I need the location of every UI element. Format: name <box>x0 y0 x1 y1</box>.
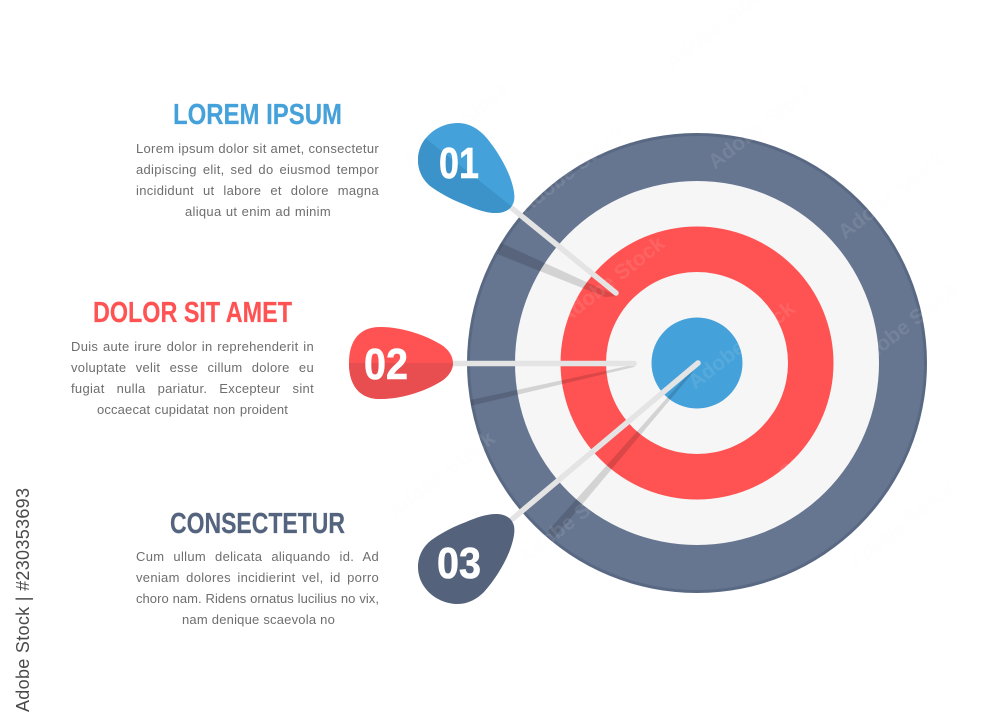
watermark: Adobe Stock <box>514 122 629 219</box>
heading: dolor sit amet: DOLOR SIT AMET <box>93 297 292 329</box>
dart 01 <box>400 118 616 293</box>
text block 1: Lorem ipsum dolor sit amet, consectetur <box>136 141 379 156</box>
watermark: Adobe Stock <box>719 432 834 529</box>
watermark: Adobe Stock <box>849 277 964 374</box>
watermark: Adobe Stock <box>384 427 499 524</box>
text block 2: voluptate velit esse cillum dolore eu <box>71 360 314 375</box>
dart 01 shaft <box>508 205 616 293</box>
watermark: Adobe Stock <box>844 477 959 574</box>
watermark: Adobe Stock <box>834 147 949 244</box>
dart 02 number: 02 <box>364 340 408 389</box>
text block 2: fugiat nulla pariatur. Excepteur sint <box>71 381 314 396</box>
text block 2: Duis aute irure dolor in reprehenderit in <box>71 339 314 354</box>
text block 2 <box>71 339 314 417</box>
text block 3: veniam dolores incidierint vel, id porro <box>136 570 379 585</box>
dart 03 shaft <box>510 363 698 521</box>
dart 02 flight <box>349 327 453 399</box>
dart 01 flight <box>418 123 514 213</box>
dart 02 <box>340 327 634 403</box>
text block 1 <box>136 141 379 219</box>
watermark: Adobe Stock <box>554 232 669 329</box>
dart shadows on the target <box>466 243 699 539</box>
watermark <box>384 0 964 574</box>
watermark: Adobe Stock <box>684 297 799 394</box>
text block 3: Cum ullum delicata aliquando id. Ad <box>136 549 379 564</box>
text block 3: choro nam. Ridens ornatus lucilius no vix, <box>136 591 379 606</box>
dart 02 shaft <box>450 361 634 366</box>
stock id side label: Adobe Stock | #230353693 <box>13 488 33 712</box>
watermark: Adobe Stock <box>399 77 514 174</box>
heading: consectetur: CONSECTETUR <box>170 508 345 540</box>
dart 01 number: 01 <box>439 139 479 188</box>
text block 3 <box>136 549 379 627</box>
watermark: Adobe Stock <box>514 472 629 569</box>
text block 3: nam denique scaevola no <box>182 612 335 627</box>
text block 2: occaecat cupidatat non proident <box>97 402 288 417</box>
target board <box>467 133 927 593</box>
dart 03 flight <box>418 514 514 604</box>
watermark: Adobe Stock <box>704 77 819 174</box>
text block 1: aliqua ut enim ad minim <box>185 204 331 219</box>
text block 1: incididunt ut labore et dolore magna <box>136 183 379 198</box>
dart 03 number: 03 <box>437 539 481 588</box>
dart 03 <box>418 363 698 604</box>
heading: lorem ipsum: LOREM IPSUM <box>173 99 342 131</box>
text block 1: adipiscing elit, sed do eiusmod tempor <box>136 162 379 177</box>
